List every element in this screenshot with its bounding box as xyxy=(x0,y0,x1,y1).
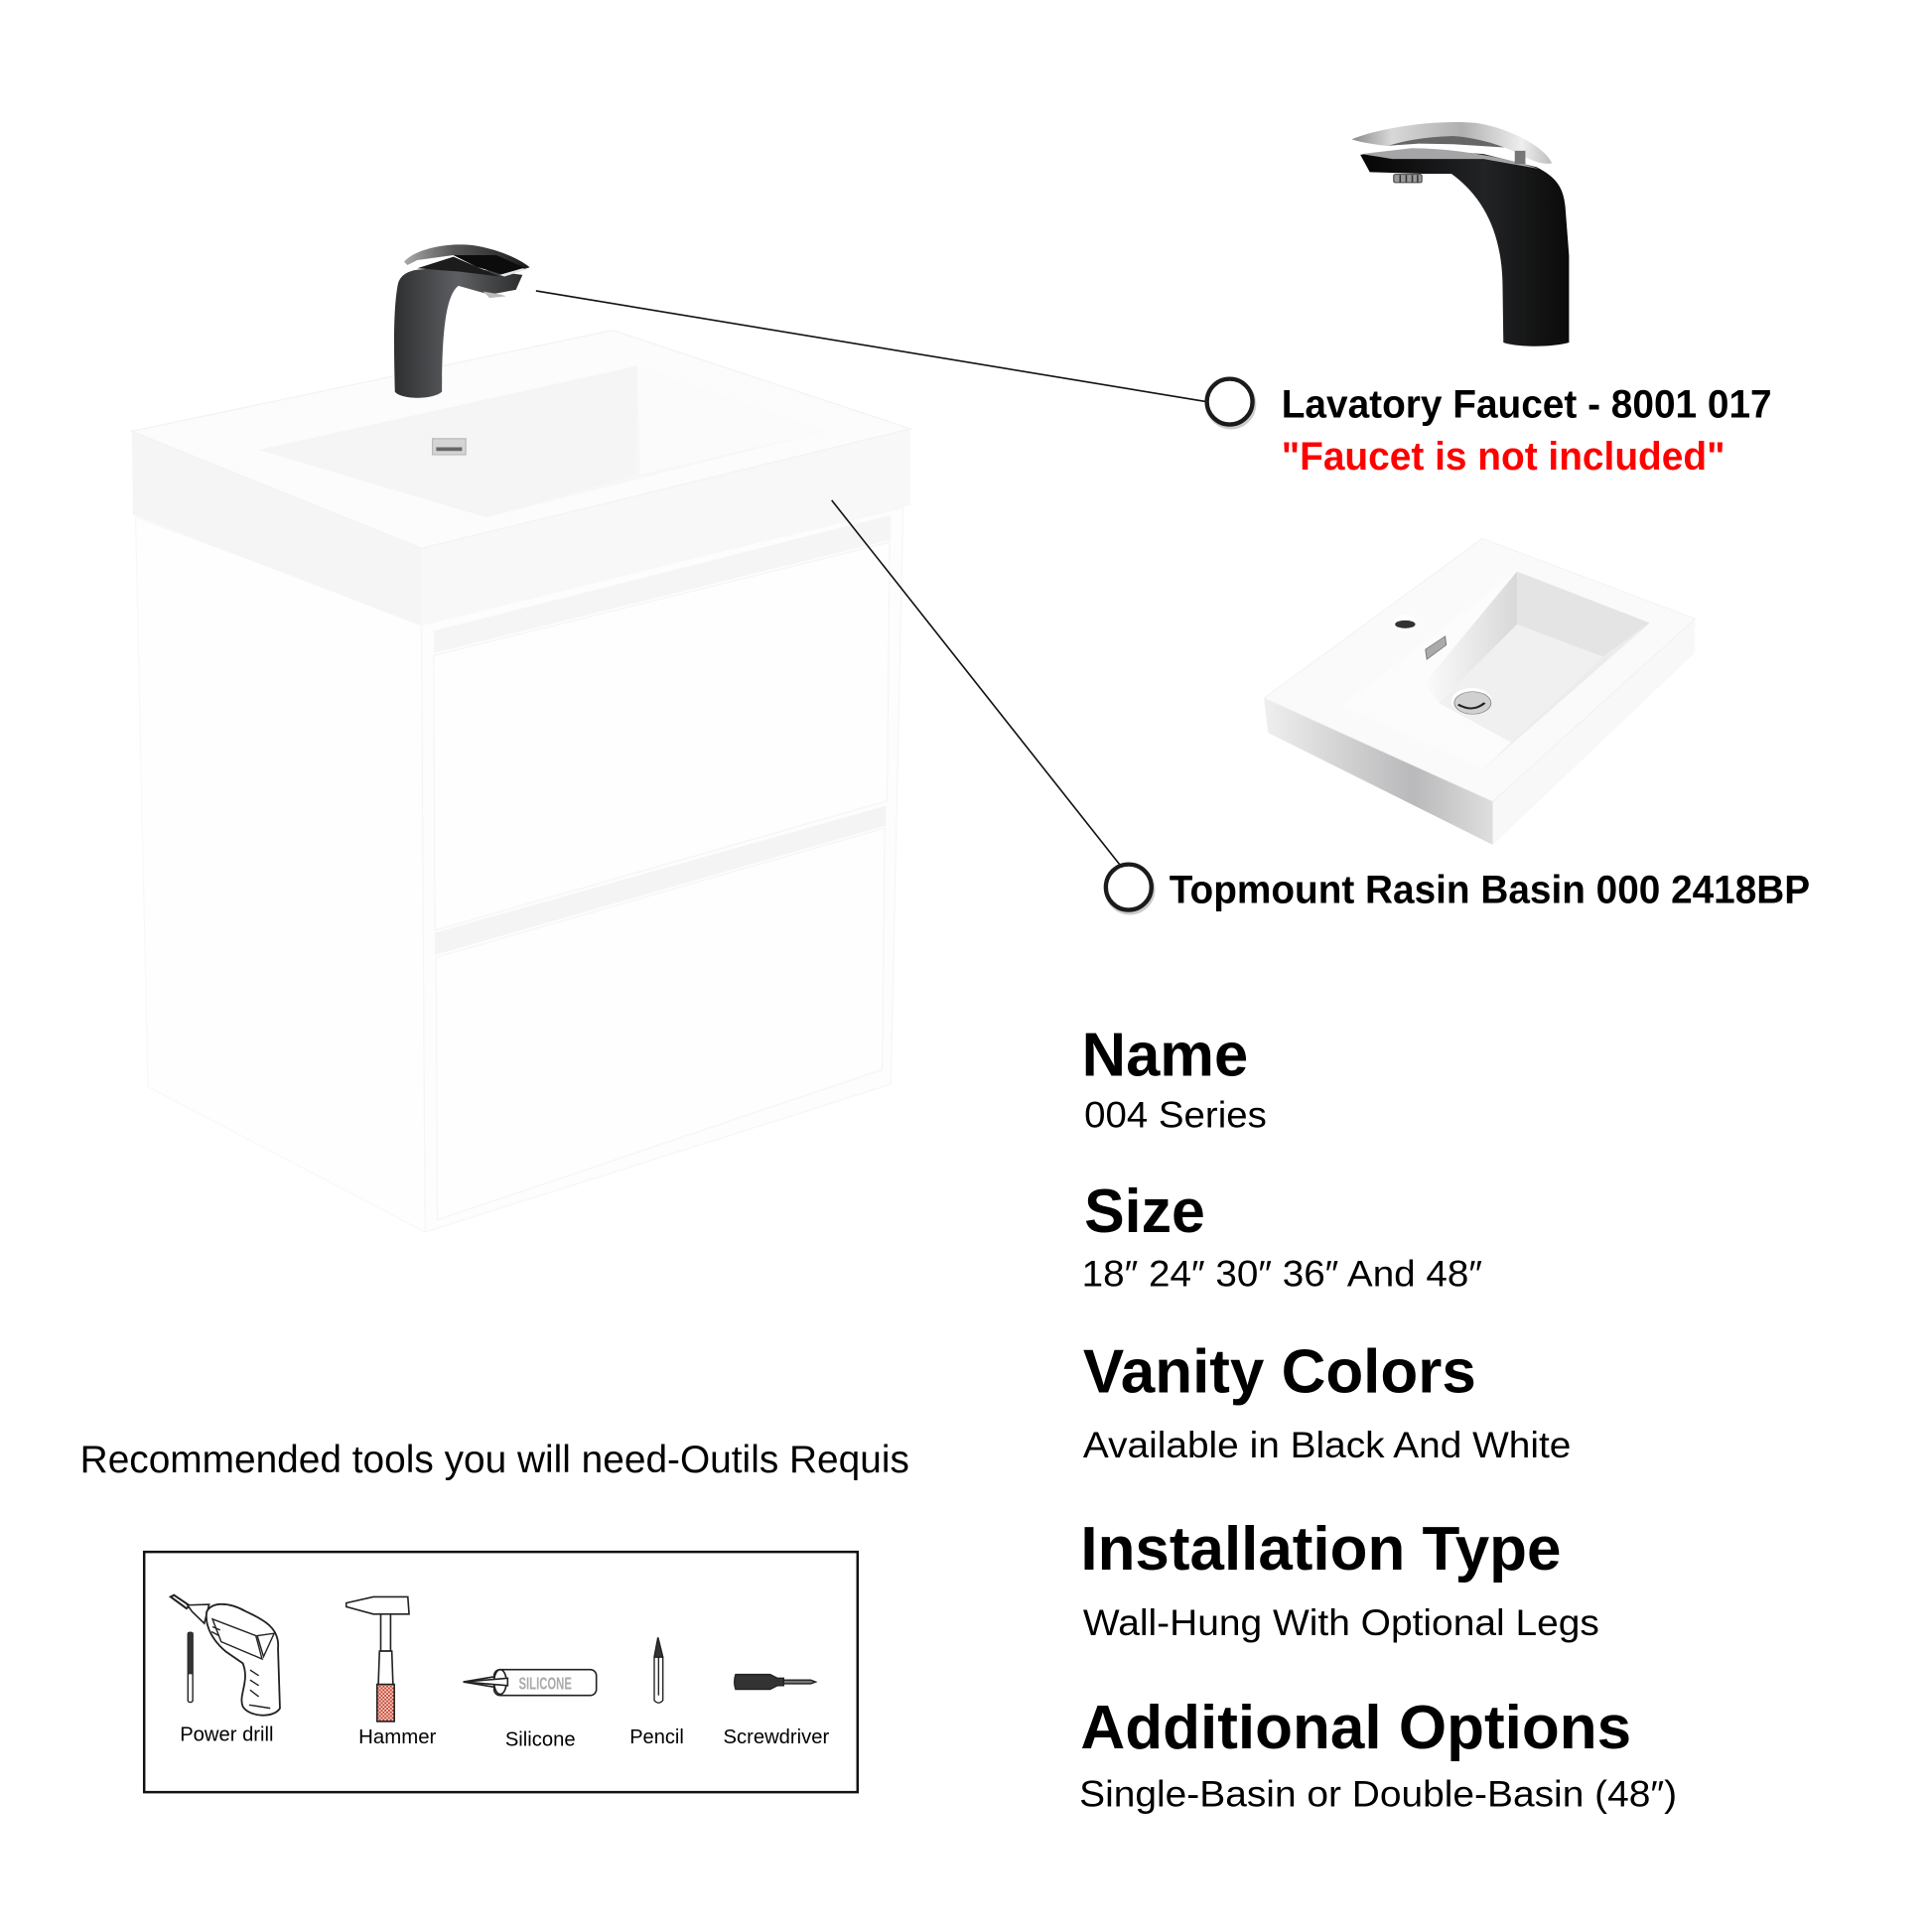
leader line: faucet xyxy=(536,291,1206,402)
spec: name: Name xyxy=(1082,1021,1248,1089)
spec: installation type: Installation Type xyxy=(1080,1515,1561,1584)
basin label: Topmount Rasin Basin 000 2418BP xyxy=(1170,869,1810,912)
spec: additional options xyxy=(1079,1694,1677,1814)
faucet label: Lavatory Faucet - 8001 017 xyxy=(1282,383,1772,427)
large faucet product photo xyxy=(1351,122,1569,346)
leader line: basin xyxy=(832,500,1120,865)
spec: installation type: Wall-Hung With Optional Legs xyxy=(1083,1601,1599,1643)
counter front edge xyxy=(421,429,910,625)
icon: pencil xyxy=(654,1637,663,1703)
spec: vanity colors xyxy=(1083,1337,1571,1465)
bottom drawer xyxy=(436,828,885,1220)
icon: silicone tube: SILICONE xyxy=(518,1674,572,1694)
panel border xyxy=(144,1552,858,1792)
spec: size: 18″ 24″ 30″ 36″ And 48″ xyxy=(1082,1253,1482,1295)
cabinet front frame xyxy=(421,507,903,1232)
cabinet left side xyxy=(136,517,425,1232)
callout marker: faucet xyxy=(1207,379,1254,427)
small faucet on vanity xyxy=(394,244,530,398)
spec: installation type xyxy=(1080,1515,1599,1643)
tool labels: Power drill xyxy=(180,1724,274,1746)
icon: power drill xyxy=(171,1595,280,1716)
counter top xyxy=(132,331,910,548)
tool labels: Screwdriver xyxy=(724,1725,829,1748)
callout marker: basin xyxy=(1106,865,1153,912)
icon: silicone tube xyxy=(464,1670,597,1696)
tool labels: Silicone xyxy=(505,1728,576,1751)
basin product photo xyxy=(1264,538,1696,845)
top drawer channel xyxy=(434,515,891,653)
drain xyxy=(1451,688,1492,715)
vanity cabinet with basin xyxy=(132,331,910,1232)
tool labels: Hammer xyxy=(358,1725,437,1748)
spec: additional options: Single-Basin or Double-Basin (48″) xyxy=(1079,1772,1677,1814)
sink bowl back wall xyxy=(637,366,826,475)
tool labels: Pencil xyxy=(629,1725,684,1748)
spec: name: 004 Series xyxy=(1084,1094,1267,1136)
faucet not included note: "Faucet is not included" xyxy=(1282,435,1725,479)
faucet hole xyxy=(1394,616,1417,630)
sink bowl xyxy=(259,366,826,517)
icon: hammer xyxy=(346,1596,409,1722)
spec: vanity colors: Vanity Colors xyxy=(1083,1337,1476,1406)
spec: size xyxy=(1082,1177,1482,1295)
counter left edge xyxy=(132,431,421,625)
tools heading: Recommended tools you will need-Outils Requis xyxy=(80,1439,909,1481)
tool labels xyxy=(180,1724,829,1751)
icon: screwdriver xyxy=(735,1675,816,1690)
spec: vanity colors: Available in Black And White xyxy=(1083,1424,1571,1465)
bottom drawer channel xyxy=(435,806,886,955)
tools panel xyxy=(144,1552,858,1792)
spec: size: Size xyxy=(1084,1177,1205,1246)
overflow xyxy=(1426,636,1447,659)
overflow xyxy=(433,439,466,455)
spec: name xyxy=(1082,1021,1267,1136)
top drawer xyxy=(434,542,890,930)
spec: additional options: Additional Options xyxy=(1080,1694,1631,1762)
